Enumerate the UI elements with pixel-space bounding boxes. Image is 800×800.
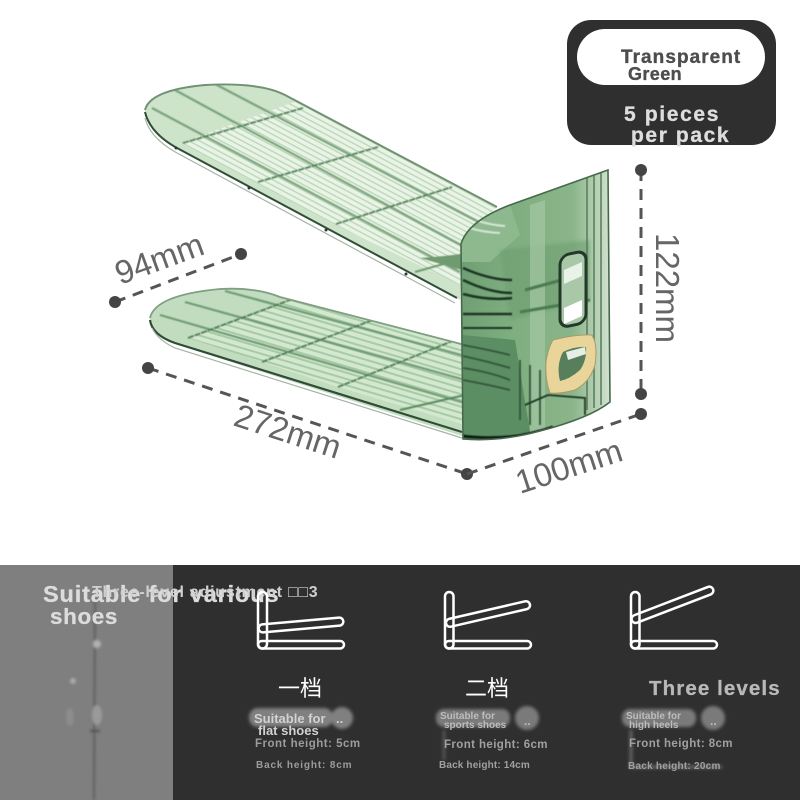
text: level two heights: Back height: 14cm bbox=[439, 760, 530, 771]
text: flat shoes: .. bbox=[336, 711, 343, 726]
heading: suitable for various shoes: shoes bbox=[50, 604, 118, 629]
text: level two heights: Front height: 6cm bbox=[444, 739, 548, 751]
badge: colour and pack size bbox=[567, 20, 776, 147]
label: level one: 一档 bbox=[278, 676, 322, 701]
text: level one heights bbox=[255, 738, 361, 771]
text: high heels: high heels bbox=[629, 720, 679, 731]
panel: dark footer bbox=[0, 565, 800, 800]
text: high heels: .. bbox=[710, 714, 717, 728]
pill: blurred badge bbox=[622, 706, 725, 767]
label: level three: Three levels bbox=[649, 677, 781, 700]
text: sports shoes: .. bbox=[524, 714, 531, 728]
dimension: height 122mm bbox=[635, 164, 686, 400]
colour label: Transparent bbox=[621, 47, 741, 68]
dimension: depth 100mm: 100mm bbox=[511, 431, 627, 501]
product: upright back panel bbox=[461, 170, 610, 440]
label: level two: 二档 bbox=[465, 676, 509, 701]
dimension: length 272mm bbox=[142, 362, 473, 480]
product: top tray bbox=[145, 84, 510, 303]
heading: suitable for various shoes bbox=[43, 581, 279, 629]
colour label second line: Green bbox=[628, 64, 682, 84]
dimension: depth 100mm bbox=[467, 408, 647, 501]
column: level three bbox=[622, 585, 781, 772]
product: bottom tray bbox=[150, 289, 465, 438]
text: flat shoes: Suitable for bbox=[254, 711, 326, 726]
pill: blurred badge bbox=[249, 707, 353, 729]
pack size: 5 pieces bbox=[624, 103, 720, 126]
icon: high heel rack bbox=[630, 585, 717, 648]
text: flat shoes: flat shoes bbox=[258, 723, 319, 738]
icon: sports rack bbox=[445, 592, 531, 648]
text: high heels bbox=[626, 711, 717, 731]
text: flat shoes bbox=[254, 711, 343, 738]
pack size second line: per pack bbox=[631, 124, 730, 147]
heading: suitable for various shoes: Suitable for various bbox=[43, 581, 279, 607]
heading: three-level adjustment: Three-level adjustment □□3 bbox=[92, 584, 318, 601]
icon: flat rack bbox=[258, 592, 344, 648]
text: high heels: Suitable for bbox=[626, 711, 681, 722]
text: level three heights: Back height: 20cm bbox=[628, 761, 721, 772]
text: level one heights: Back height: 8cm bbox=[256, 760, 352, 771]
panel: grey photo strip bbox=[0, 565, 173, 800]
dimension: width 94mm: 94mm bbox=[110, 225, 209, 292]
pill: blurred badge bbox=[436, 706, 539, 760]
text: level three heights: Front height: 8cm bbox=[629, 738, 733, 750]
text: level one heights: Front height: 5cm bbox=[255, 738, 361, 750]
text: sports shoes: sports shoes bbox=[444, 720, 507, 731]
text: level three heights bbox=[628, 738, 733, 772]
text: level two heights bbox=[439, 739, 548, 771]
gold ring handle bbox=[546, 335, 596, 393]
dimension: width 94mm bbox=[109, 225, 247, 308]
colour pill bbox=[577, 29, 765, 85]
dimension: length 272mm: 272mm bbox=[230, 396, 346, 466]
text: sports shoes bbox=[440, 711, 531, 731]
column: level one bbox=[249, 592, 361, 771]
slot bbox=[560, 250, 586, 328]
text: sports shoes: Suitable for bbox=[440, 711, 495, 722]
dimension: height 122mm: 122mm bbox=[649, 233, 686, 343]
column: level two bbox=[436, 592, 548, 771]
